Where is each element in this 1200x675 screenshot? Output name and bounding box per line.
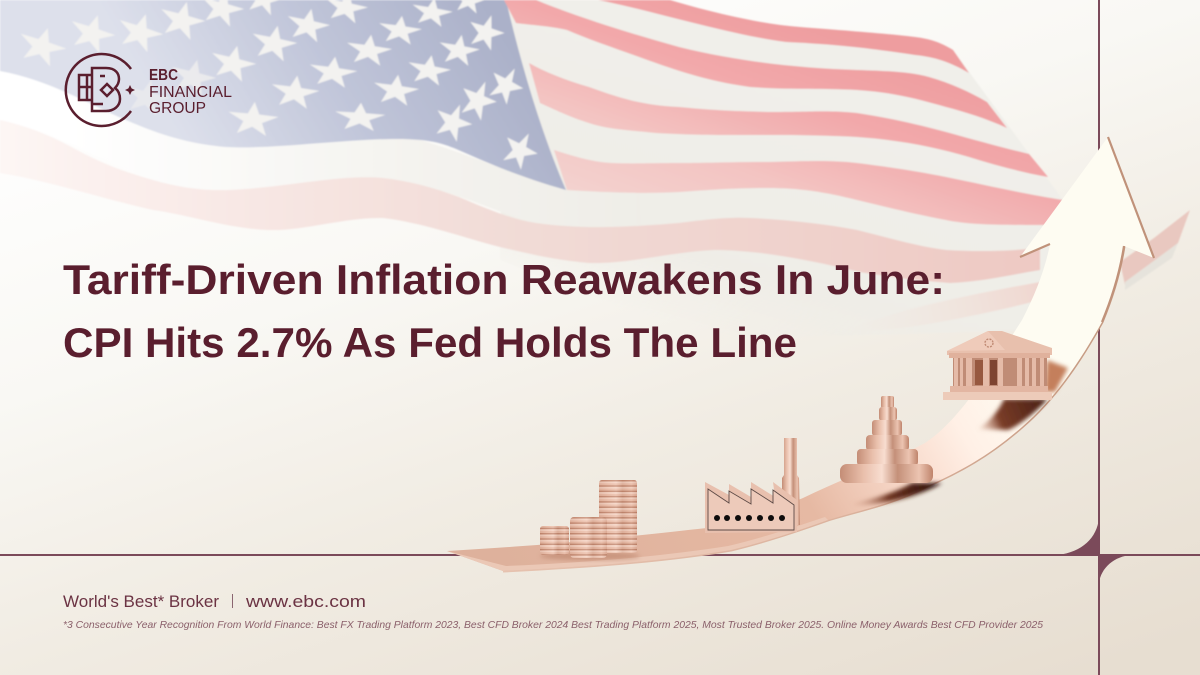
arrow head edges [1020,137,1154,322]
title: Tariff-Driven Inflation Reawakens In June: [63,256,945,303]
object shadows [853,360,1068,506]
logo sparkle [125,85,135,95]
flag tail behind arrow [1120,210,1190,285]
medium coin stack [570,517,607,558]
footer tagline [63,592,366,611]
logo mark [66,54,131,126]
logo wordmark: FINANCIAL [149,84,232,101]
factory chimney [782,438,800,525]
flag canton [0,0,566,190]
footnote: *3 Consecutive Year Recognition From World Finance: Best FX Trading Platform 2023, Best CFD Broker 2024 Best Trading Platform 2025, Most Trusted Broker 2025. Online Money Awards Best CFD Provider 2025 [63,619,1043,631]
logo wordmark [149,67,232,117]
flag base white [500,0,1070,340]
logo wordmark: GROUP [149,100,206,117]
icon: bank building [943,331,1052,400]
tall coin stack [599,480,637,553]
bank base [950,386,1048,392]
flag faint lower stripe [840,282,1040,332]
logo [66,54,232,126]
arrow body [447,137,1154,571]
flag left white fold [0,71,640,228]
flag faded lower stripe [0,120,1040,283]
footer tagline: www.ebc.com [245,592,366,611]
american flag [0,0,1190,340]
ribbon arrow [447,137,1154,571]
arrow lower edge [503,246,1124,571]
short coin stack [540,526,569,555]
flag stars [14,0,544,173]
bank wall [953,358,1047,387]
flag red stripes [504,0,1063,225]
icon: coin stacks [540,480,640,560]
title: CPI Hits 2.7% As Fed Holds The Line [63,319,797,366]
bank columns [954,358,1044,387]
footer tagline: World's Best* Broker [63,592,219,611]
bank roof [947,331,1052,355]
logo wordmark: EBC [149,67,178,84]
icon: tiered tower [840,396,933,483]
icon: factory [705,438,800,533]
title [63,256,945,366]
factory windows [714,515,785,521]
factory building [705,482,797,533]
arrow front lip [447,517,828,571]
